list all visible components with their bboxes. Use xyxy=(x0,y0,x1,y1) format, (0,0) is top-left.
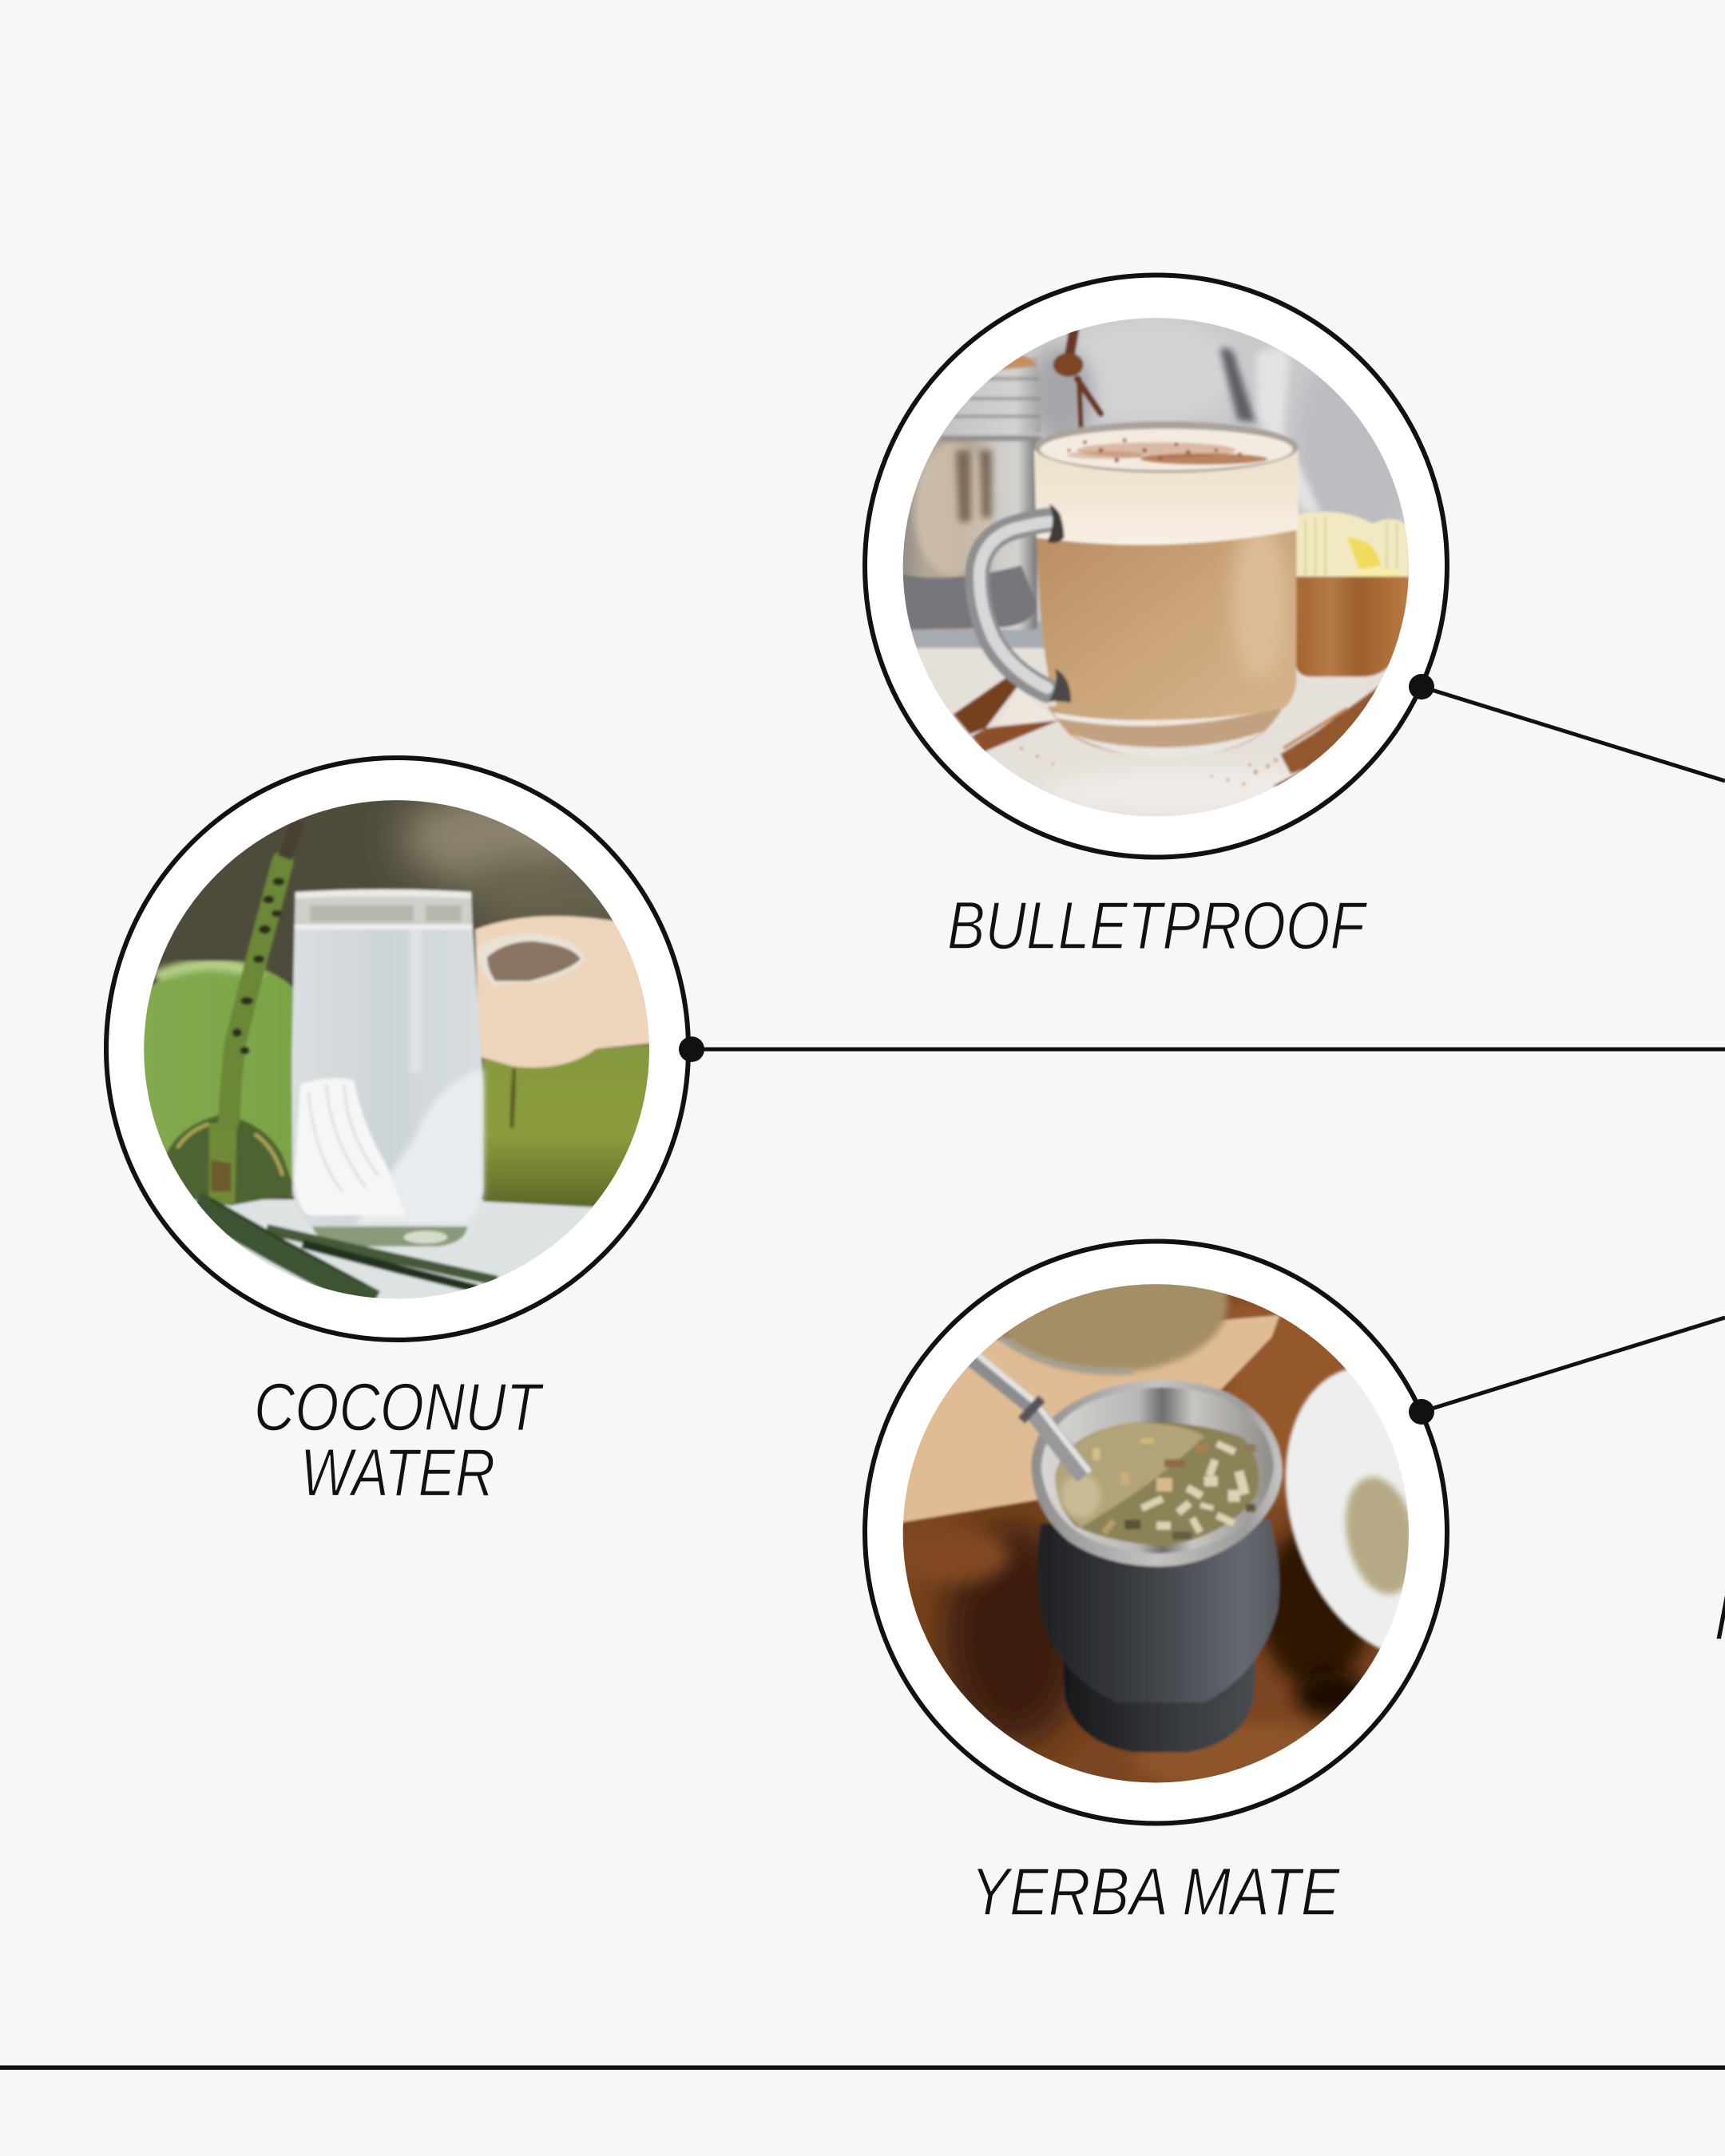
blurred bowl xyxy=(989,1234,1228,1373)
bottom rule xyxy=(0,2065,1725,2070)
spilled spice xyxy=(1020,747,1278,786)
cinnamon left xyxy=(953,676,1017,735)
woven mat xyxy=(898,1315,1279,1523)
herb flakes xyxy=(1092,1438,1255,1540)
calyx xyxy=(165,1114,296,1206)
right coconut husk xyxy=(475,916,660,1068)
connector dot: yerba mate xyxy=(1409,1399,1434,1425)
panel: yerba mate xyxy=(865,1234,1532,1825)
mug handle xyxy=(978,520,1049,691)
photo: yerba mate xyxy=(886,1234,1532,1825)
inner wall xyxy=(1041,1388,1274,1553)
ring: coconut water xyxy=(106,758,688,1340)
connector dot: coconut water xyxy=(679,1036,704,1062)
label: yerba mate: YERBA MATE xyxy=(971,1854,1340,1929)
ring: bulletproof xyxy=(865,275,1447,858)
leaves xyxy=(195,1199,497,1302)
connector: yerba mate to hub xyxy=(1422,1318,1725,1412)
gourd base xyxy=(1063,1663,1255,1752)
shaker lid xyxy=(938,357,1041,440)
connector: coconut water to hub xyxy=(692,1048,1725,1051)
coconut flesh xyxy=(354,1068,483,1225)
plate xyxy=(1251,1339,1532,1684)
wooden bowl xyxy=(1295,577,1410,676)
rim xyxy=(1031,1380,1283,1567)
panel: bulletproof xyxy=(865,275,1447,862)
mug latte xyxy=(1037,528,1296,720)
herbs base xyxy=(1055,1422,1259,1547)
photo: coconut water xyxy=(136,783,692,1358)
butter xyxy=(1297,512,1409,577)
gray band and counter xyxy=(910,620,1045,648)
label line: water: WATER xyxy=(300,1435,495,1510)
label line: coconut: COCONUT xyxy=(254,1369,545,1445)
shaker xyxy=(898,438,1037,630)
glass rim xyxy=(295,893,473,926)
mug base xyxy=(1046,704,1283,754)
straw xyxy=(972,1359,1031,1406)
left coconut xyxy=(136,961,295,1195)
label: coconut water xyxy=(254,1369,545,1510)
water xyxy=(291,926,483,1227)
table xyxy=(136,1199,692,1358)
cinnamon dust xyxy=(1067,438,1267,465)
glass base xyxy=(312,1227,467,1246)
panel: coconut water xyxy=(106,758,692,1358)
ring: yerba mate xyxy=(865,1241,1447,1824)
stem spots xyxy=(232,878,284,1055)
mug foam xyxy=(1034,450,1299,545)
gourd body xyxy=(1037,1520,1279,1702)
coconut hole xyxy=(477,933,585,985)
stem xyxy=(229,862,283,1120)
cord xyxy=(1053,331,1100,426)
cinnamon right xyxy=(1280,684,1381,774)
right coconut shell xyxy=(483,1044,660,1211)
connector: bulletproof to hub xyxy=(1422,687,1725,781)
connector dot: bulletproof xyxy=(1409,674,1434,700)
label: bulletproof: BULLETPROOF xyxy=(947,888,1368,963)
photo: bulletproof coffee xyxy=(902,318,1409,816)
